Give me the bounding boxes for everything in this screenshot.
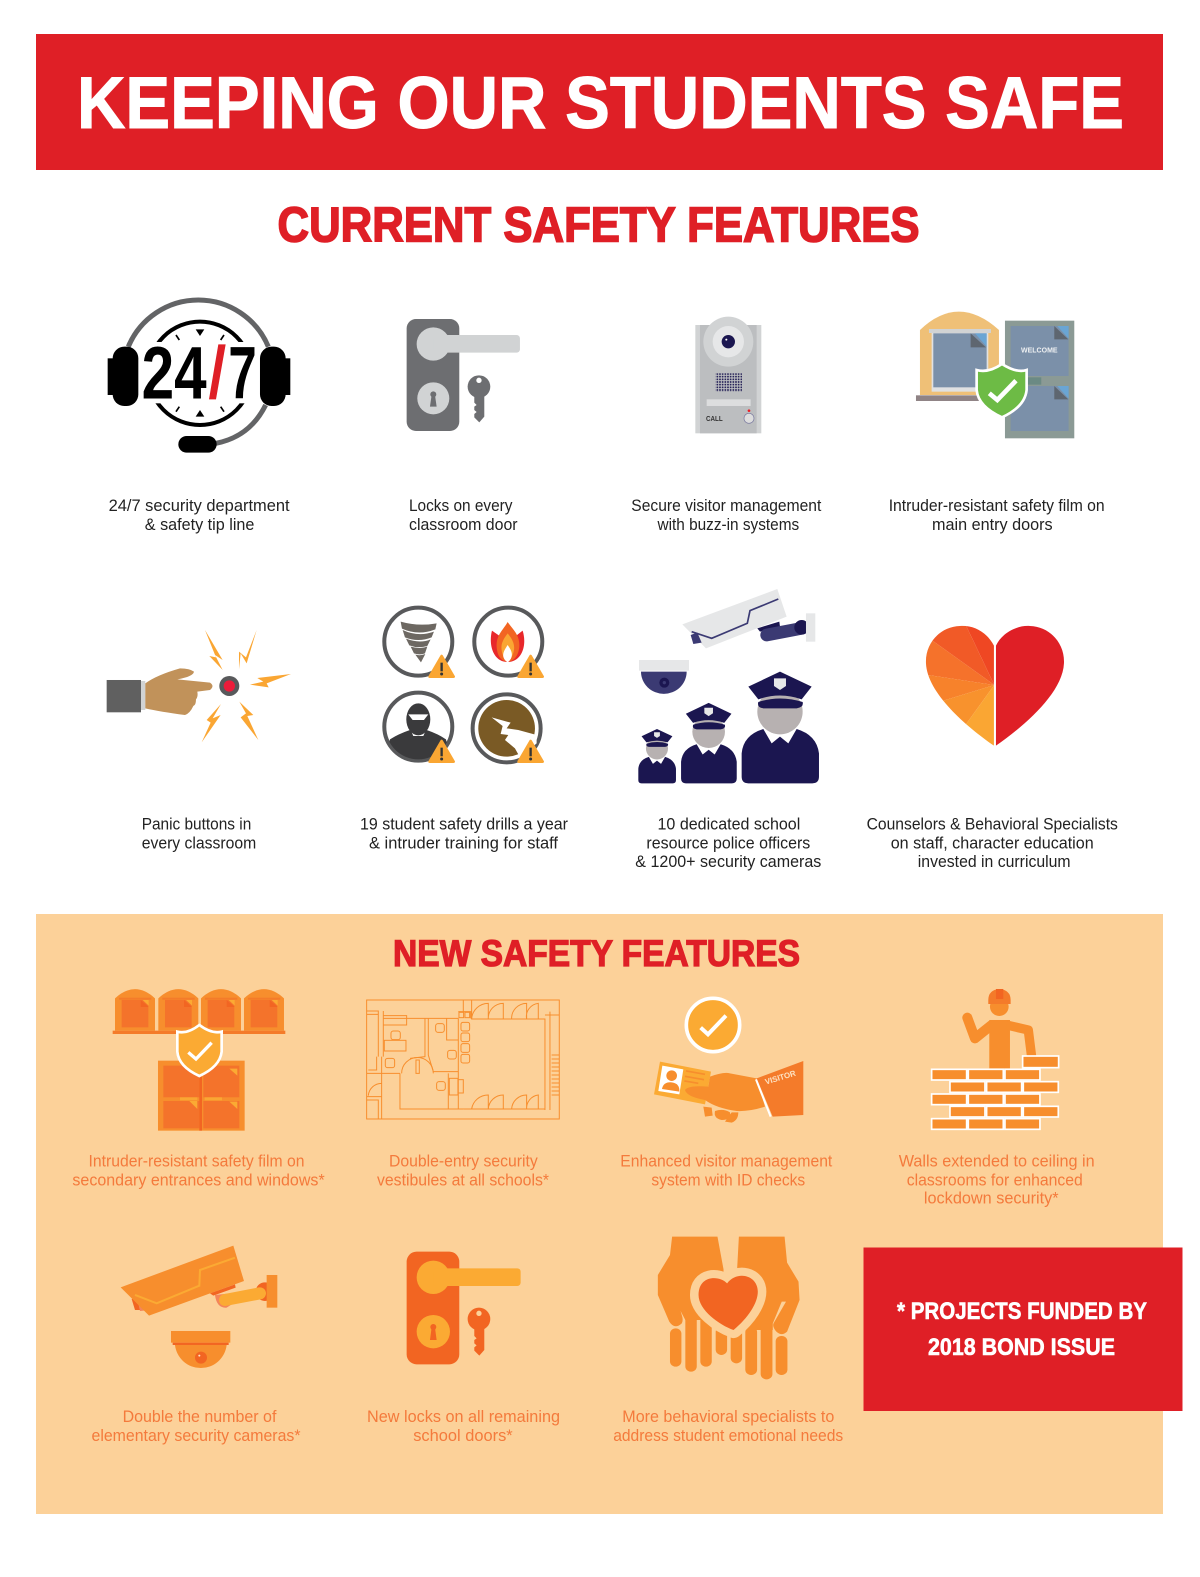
caption: address student emotional needs — [613, 1427, 843, 1445]
callout: projects funded by bond — [864, 1248, 1182, 1411]
icon: orange door lock and key — [407, 1252, 521, 1364]
caption: elementary security cameras* — [92, 1427, 301, 1445]
caption: invested in curriculum — [918, 853, 1071, 871]
icon: hand pressing panic button — [107, 630, 291, 742]
caption: More behavioral specialists to — [622, 1408, 834, 1426]
caption: with buzz-in systems — [657, 516, 799, 534]
feature: enhanced visitor management — [620, 998, 833, 1190]
caption — [409, 497, 518, 534]
caption: 19 student safety drills a year — [360, 816, 568, 834]
caption: resource police officers — [646, 834, 810, 852]
icon: buzz-in intercom: CALL — [706, 414, 723, 423]
badge: earthquake — [473, 694, 543, 762]
icon: two-tone heart — [926, 626, 1064, 746]
icon: check, ID card and hand — [654, 998, 803, 1123]
icon: window, door and green shield — [916, 312, 1074, 438]
icon: floor plan — [367, 1000, 559, 1119]
caption — [613, 1408, 843, 1445]
caption — [899, 1152, 1095, 1208]
caption: system with ID checks — [651, 1172, 805, 1190]
icon: door lock and key — [407, 319, 520, 431]
icon: security cameras and three officers — [638, 589, 819, 783]
caption: Locks on every — [409, 497, 513, 515]
caption: 24/7 security department — [109, 497, 290, 515]
feature: visitor management — [631, 317, 822, 534]
feature: safety film on main entry doors — [889, 312, 1105, 534]
caption — [631, 497, 822, 534]
caption — [92, 1408, 301, 1445]
caption: Intruder-resistant safety film on — [88, 1152, 304, 1170]
feature: new locks — [367, 1252, 560, 1445]
caption: classroom door — [409, 516, 518, 534]
caption: vestibules at all schools* — [377, 1172, 550, 1190]
badge: tornado — [384, 608, 454, 677]
panel: new safety features — [36, 914, 1163, 1514]
caption: Enhanced visitor management — [620, 1152, 833, 1170]
feature: double elementary cameras — [92, 1246, 301, 1445]
caption: on staff, character education — [891, 834, 1094, 852]
feature: classroom locks — [407, 319, 520, 534]
caption: Intruder-resistant safety film on — [889, 497, 1105, 515]
feature: double-entry vestibules — [367, 1000, 559, 1190]
caption: school doors* — [413, 1427, 513, 1445]
caption — [620, 1152, 833, 1190]
caption: classrooms for enhanced — [907, 1172, 1083, 1190]
caption: & 1200+ security cameras — [635, 853, 821, 871]
heading: current safety features: CURRENT SAFETY FEATURES — [278, 198, 920, 252]
caption — [72, 1152, 325, 1190]
feature: behavioral specialists — [613, 1237, 843, 1445]
icon: buzz-in intercom — [695, 317, 761, 433]
icon: worker and brick wall — [932, 989, 1059, 1129]
feature: panic buttons — [107, 630, 291, 852]
feature: counselors — [867, 626, 1118, 867]
caption: main entry doors — [932, 516, 1053, 534]
caption: Secure visitor management — [631, 497, 822, 515]
caption: Double-entry security — [389, 1152, 539, 1170]
feature: safety drills — [360, 608, 568, 852]
caption: Panic buttons in — [142, 816, 251, 834]
feature: police officers and cameras — [635, 589, 821, 871]
caption: Double the number of — [123, 1408, 277, 1426]
feature: 24/7 security — [108, 300, 290, 534]
icon: tornado, fire, intruder and earthquake badges — [384, 608, 543, 762]
caption: secondary entrances and windows* — [72, 1172, 325, 1190]
caption: Walls extended to ceiling in — [899, 1152, 1095, 1170]
title banner: KEEPING OUR STUDENTS SAFE — [77, 63, 1124, 144]
caption: & safety tip line — [145, 516, 254, 534]
caption — [377, 1152, 550, 1190]
caption — [889, 497, 1105, 534]
icon: orange security cameras — [121, 1246, 277, 1368]
icon: windows, shield and doors — [113, 989, 285, 1131]
badge: fire — [474, 608, 543, 677]
icon: 24/7 headset: 7 — [228, 331, 257, 414]
caption: every classroom — [142, 834, 256, 852]
caption — [109, 497, 290, 534]
badge: intruder — [384, 693, 454, 762]
icon: check, ID card and hand: VISITOR — [764, 1069, 797, 1087]
heading: new safety features: NEW SAFETY FEATURES — [393, 933, 800, 974]
icon: 24/7 headset: 24 — [142, 331, 207, 414]
caption: 10 dedicated school — [658, 816, 800, 834]
callout: projects funded by bond: 2018 BOND ISSUE — [928, 1334, 1115, 1361]
caption: lockdown security* — [924, 1190, 1059, 1208]
title banner — [36, 34, 1163, 170]
caption: & intruder training for staff — [369, 834, 558, 852]
caption: New locks on all remaining — [367, 1408, 560, 1426]
caption — [367, 1408, 560, 1445]
icon: 24/7 headset — [108, 300, 290, 453]
icon: hands holding heart — [658, 1237, 800, 1379]
feature: film on secondary entrances — [72, 989, 325, 1190]
caption — [360, 816, 568, 852]
feature: walls extended to ceiling — [899, 989, 1095, 1208]
callout: projects funded by bond: * PROJECTS FUNDED BY — [897, 1298, 1147, 1325]
caption — [867, 816, 1118, 871]
caption: Counselors & Behavioral Specialists — [867, 816, 1118, 834]
caption — [142, 816, 256, 852]
icon: window, door and green shield: WELCOME — [1021, 346, 1058, 355]
caption — [635, 816, 821, 871]
